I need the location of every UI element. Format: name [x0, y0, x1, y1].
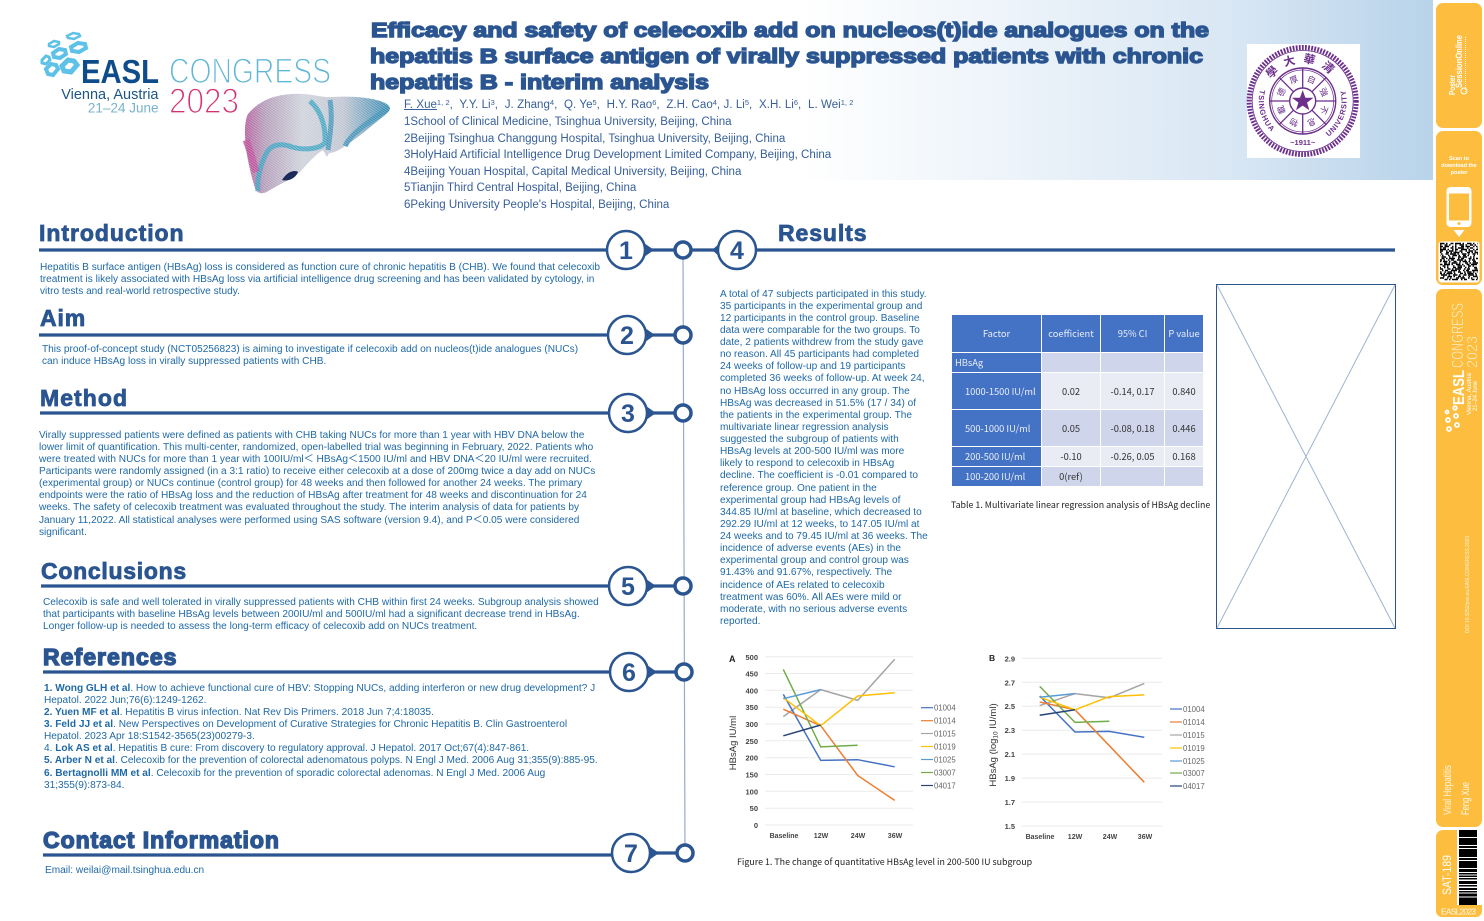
table: multivariate regression — [952, 315, 1203, 486]
panel: poster session online: SessionOnline — [1454, 35, 1464, 88]
y axis ticks: 450 — [745, 670, 758, 678]
panel: congress details — [1436, 289, 1482, 827]
table: multivariate regression: 0.168 — [1172, 449, 1196, 463]
text: introduction — [40, 262, 600, 297]
table: multivariate regression: -0.26, 0.05 — [1110, 449, 1155, 463]
text: method: weeks. The safety of celecoxib treatment was evaluated throughout the study. The interim analysis of data for patients by — [39, 502, 579, 513]
text: references: 3. Feld JJ et al. New Perspectives on Development of Curative Strategies for Chronic Hepatitis B. Clin Gastroenterol — [44, 719, 567, 730]
table: multivariate regression: -0.08, 0.18 — [1110, 420, 1155, 434]
text: method: Participants were randomly assigned (in a 3:1 ratio) to receive either celecoxib at a dose of 200mg twice a day add on NUCs — [39, 466, 595, 477]
table: multivariate regression: 95% CI — [1118, 326, 1147, 340]
y axis ticks: 100 — [745, 787, 758, 796]
seal inner characters: 不 — [1317, 104, 1331, 116]
legend: 01025 — [934, 756, 956, 764]
y axis ticks: 1.5 — [1005, 822, 1015, 831]
seal inner characters: 強 — [1317, 86, 1331, 99]
section marker 2: 2 — [620, 322, 634, 350]
section marker 3 — [40, 394, 691, 432]
title: hepatitis B surface antigen of virally suppressed patients with chronic — [370, 45, 1203, 68]
text: introduction: vitro tests and real-world retrospective study. — [40, 286, 240, 297]
figure caption: Figure 1. The change of quantitative HBsAg level in 200-500 IU subgroup — [737, 855, 1032, 868]
x axis labels: 24W — [851, 833, 866, 840]
logo year: 2023 — [169, 82, 239, 121]
seal inner characters: 息 — [1305, 115, 1318, 130]
affiliations — [404, 116, 832, 211]
section marker 3: 3 — [621, 400, 635, 428]
data lines — [1040, 683, 1144, 782]
text: results: A total of 47 subjects participated in this study. — [720, 288, 927, 300]
y axis ticks: 2.3 — [1005, 726, 1015, 735]
legend: 01019 — [1183, 744, 1205, 753]
heading: Method: Method — [40, 385, 128, 411]
text: references: 31;355(9):873-84. — [44, 780, 124, 791]
data lines — [783, 659, 895, 800]
text: results: 344.85 IU/ml at baseline, which decreased to — [720, 507, 922, 518]
y axis title: HBsAg IU/ml — [728, 716, 739, 770]
table: multivariate regression: 1000-1500 IU/ml — [965, 384, 1036, 398]
panel: scan to download — [1436, 131, 1482, 285]
affiliations: 1School of Clinical Medicine, Tsinghua University, Beijing, China — [404, 116, 732, 128]
panel: congress details: CONGRESS — [1448, 303, 1467, 368]
affiliations: 6Peking University People's Hospital, Beijing, China — [404, 199, 669, 211]
text: results: 24 weeks of follow-up and 19 participants — [720, 361, 905, 372]
affiliations: 3HolyHaid Artificial Intelligence Drug Development Limited Company, Beijing, China — [404, 149, 831, 161]
text: references: 6. Bertagnolli MM et al. Celecoxib for the prevention of sporadic colorectal adenomas. N Engl J Med. 2006 Aug — [44, 768, 545, 779]
table: multivariate regression: 0(ref) — [1059, 469, 1083, 483]
section marker 1 — [39, 231, 691, 269]
text: method: significant. — [39, 527, 87, 538]
x axis labels: 24W — [1103, 834, 1118, 841]
text: results: incidence of adverse events (AEs) in the — [720, 543, 901, 554]
text: references: Hepatol. 2022 Jun;76(6):1249-1262. — [44, 695, 206, 706]
panel: scan to download: download the — [1441, 163, 1477, 169]
panel: poster session online: Poster — [1447, 74, 1457, 95]
y axis ticks: 0 — [754, 821, 758, 830]
text: results: likely to respond to celecoxib in HBsAg — [720, 458, 894, 469]
panel: poster number and barcode — [1436, 830, 1482, 917]
affiliations: 2Beijing Tsinghua Changgung Hospital, Tsinghua University, Beijing, China — [404, 133, 785, 145]
text: results: data were comparable for the two groups. To — [720, 325, 920, 336]
legend: 03007 — [1183, 769, 1205, 778]
logo location: Vienna, Austria — [61, 87, 159, 103]
text: results: multivariate linear regression analysis — [720, 422, 889, 433]
y axis ticks: 1.9 — [1005, 774, 1015, 783]
x axis labels: 36W — [1138, 834, 1153, 841]
text: references: 1. Wong GLH et al. How to achieve functional cure of HBV: Stopping NUCs, adding interferon or new drug development? J — [44, 682, 595, 694]
y axis ticks: 350 — [745, 703, 758, 712]
text: conclusions: that participants with baseline HBsAg levels between 200IU/ml and 500IU/ml had a significant decrease trend in HBsAg. — [43, 609, 580, 620]
panel: congress details: Viral Hepatitis — [1442, 765, 1454, 815]
panel: congress details: 2023 — [1464, 336, 1481, 368]
table: multivariate regression: 0.05 — [1062, 420, 1080, 434]
panel: poster session online — [1436, 3, 1482, 128]
text: results: decline. The coefficient is -0.01 compared to — [720, 470, 918, 481]
heading: Contact Information: Contact Information — [43, 827, 280, 853]
text: results: HBsAg levels at 200-500 IU/ml was more — [720, 446, 904, 457]
legend: 03007 — [934, 768, 956, 778]
image placeholder — [1216, 284, 1396, 629]
text: aim: can induce HBsAg loss in virally suppressed patients with CHB. — [42, 356, 326, 367]
seal star — [1292, 90, 1314, 110]
seal top characters: 學大華清 — [1265, 53, 1336, 78]
heading: Conclusions: Conclusions — [41, 558, 187, 584]
authors and affiliations — [404, 98, 854, 211]
text: references — [44, 682, 598, 791]
text: results: suggested the subgroup of patients with — [720, 434, 899, 445]
text: results — [720, 288, 928, 627]
seal inner characters: 自 — [1305, 73, 1318, 87]
header gradient band — [0, 0, 1433, 180]
legend: 01004 — [934, 704, 956, 712]
x axis labels — [1026, 834, 1153, 841]
text: results: the patients in the experimental group. The — [720, 410, 912, 421]
EASL congress logo — [40, 32, 331, 121]
legend: 01015 — [934, 730, 956, 738]
text: results: experimental group and control group was — [720, 555, 909, 566]
text: results: 91.43% and 91.67%, respectively. The — [720, 567, 892, 578]
text: results: no HBsAg loss occurred in any group. The — [720, 386, 910, 396]
panel: congress details: DOI 10.3252/pso.eu.EASLCONGRESS.2023 — [1465, 536, 1471, 633]
heading: Results: Results — [778, 220, 867, 246]
table: multivariate regression: Factor — [983, 326, 1010, 340]
y axis title: IU/ml) — [988, 703, 999, 731]
seal inner characters: 厚 — [1288, 72, 1301, 87]
text: aim: This proof-of-concept study (NCT05256823) is aiming to investigate if celecoxib add on nucleos(t)ide analogues (NUCs) — [42, 344, 578, 354]
connector spine — [683, 250, 685, 853]
panel: congress details: 21–24 June — [1473, 380, 1479, 411]
text: method: January 11,2022. All statistical analyses were performed using SAS software (version 9.4), and P＜0.05 were considered — [39, 515, 579, 526]
seal inner characters: 載 — [1274, 103, 1289, 116]
y axis ticks: 150 — [745, 770, 758, 780]
panel: poster number and barcode: SAT-189 — [1440, 855, 1454, 895]
text: method: Virally suppressed patients were defined as patients with CHB taking NUCs for more than 1 year with HBV DNA below the — [39, 430, 584, 440]
text: references: 4. Lok AS et al. Hepatitis B cure: From discovery to regulatory approval. J Hepatol. 2017 Oct;67(4):847-861. — [44, 743, 529, 754]
panel: congress details: Vienna, Austria — [1466, 373, 1473, 415]
text: references: 5. Arber N et al. Celecoxib for the prevention of colorectal adenomatous polyps. N Engl J Med. 2006 Aug 31;355(9):885-95. — [44, 755, 598, 766]
x axis labels: Baseline — [770, 833, 799, 840]
text: results: incidence of AEs related to celecoxib — [720, 580, 885, 590]
text: contact email: Email: weilai@mail.tsinghua.edu.cn — [45, 864, 204, 876]
x axis labels — [770, 833, 903, 840]
panel: congress details: Feng Xue — [1460, 782, 1472, 815]
heading: Introduction: Introduction — [39, 220, 185, 246]
legend — [1170, 705, 1205, 791]
text: method: lower limit of quantification. This multi-center, randomized, open-labelled trial was beginning in February, 2022. Patients who — [39, 442, 593, 453]
heading: Aim: Aim — [40, 305, 86, 331]
panel letter: A — [729, 654, 736, 664]
y axis ticks: 250 — [745, 737, 758, 746]
heading: References: References — [43, 644, 178, 670]
y axis title: HBsAg (log — [988, 739, 999, 787]
section marker 5 — [41, 567, 691, 605]
legend: 01014 — [1183, 718, 1205, 727]
text: results: completed 36 weeks of follow-up. At week 24, — [720, 373, 925, 384]
text: results: 24 weeks and to 79.45 IU/ml at 36 weeks. The — [720, 531, 928, 542]
text: conclusions — [43, 596, 599, 632]
legend: 04017 — [1183, 782, 1205, 791]
table: multivariate regression: 0.840 — [1172, 384, 1196, 398]
table: multivariate regression: P value — [1168, 326, 1200, 340]
text: results: moderate, with no serious adverse events — [720, 604, 907, 615]
table: multivariate regression: 200-500 IU/ml — [965, 449, 1025, 463]
legend: 01004 — [1183, 705, 1205, 714]
table: multivariate regression: 100-200 IU/ml — [965, 469, 1025, 483]
seal ring text left: TSINGHUA — [1258, 90, 1274, 132]
section marker 4: 4 — [730, 237, 744, 265]
icon: hexagons — [1446, 406, 1459, 431]
title: Efficacy and safety of celecoxib add on nucleos(t)ide analogues on the — [371, 19, 1209, 42]
seal inner characters — [1274, 72, 1331, 130]
section marker 4 — [691, 231, 1395, 269]
y axis ticks: 2.5 — [1005, 702, 1015, 711]
panel: poster number and barcode: EASL2023 — [1441, 906, 1476, 916]
authors: F. Xue1, 2, Y.Y. Li3, J. Zhang4, Q. Ye5, H.Y. Rao6, Z.H. Cao4, J. Li5, X.H. Li6, L. Wei1, 2 — [404, 98, 853, 110]
table: multivariate regression: -0.14, 0.17 — [1110, 384, 1155, 398]
text: results: 292.29 IU/ml at 12 weeks, to 147.05 IU/ml at — [720, 519, 919, 530]
y axis ticks: 1.7 — [1005, 798, 1015, 807]
y axis ticks: 50 — [750, 804, 758, 813]
title — [370, 19, 1210, 94]
text: references: 2. Yuen MF et al. Hepatitis B virus infection. Nat Rev Dis Primers. 2018 Jun 7;4:18035. — [44, 707, 434, 718]
logo dates: 21–24 June — [88, 100, 158, 116]
x axis labels: Baseline — [1026, 834, 1055, 841]
text: results: 35 participants in the experimental group and — [720, 301, 922, 312]
seal ring text right: UNIVERSITY — [1326, 92, 1347, 136]
y axis ticks: 500 — [745, 653, 758, 662]
section marker 2 — [39, 316, 691, 354]
text: method: endpoints were the ratio of HBsAg loss and the reduction of HBsAg after treatment for 48 weeks and discontinuation for 24 — [39, 490, 587, 501]
table caption: Table 1. Multivariate linear regression analysis of HBsAg decline — [951, 498, 1210, 511]
section marker 5: 5 — [621, 573, 635, 601]
section marker 6 — [43, 653, 692, 691]
icon: arrow down — [1454, 230, 1464, 237]
text: aim — [42, 344, 578, 367]
panel: scan to download: poster — [1451, 170, 1468, 176]
text: introduction: Hepatitis B surface antigen (HBsAg) loss is considered as function cure of chronic hepatitis B (CHB). We found that celecoxib — [40, 262, 600, 272]
y axis ticks: 2.1 — [1005, 750, 1015, 759]
table: multivariate regression: 500-1000 IU/ml — [965, 420, 1030, 434]
text: conclusions: Longer follow-up is needed to assess the long-term efficacy of celecoxib add on NUCs treatment. — [43, 621, 477, 632]
x axis labels: 12W — [814, 833, 829, 840]
seal inner characters: 德 — [1274, 86, 1289, 98]
section marker 7: 7 — [624, 840, 638, 868]
section marker 7 — [43, 834, 693, 872]
text: method: were treated with NUCs for more than 1 year with 100IU/ml＜ HBsAg＜1500 IU/ml and HBV DNA＜20 IU/ml were recruited. — [39, 454, 592, 465]
text: results: treatment was 60%. All AEs were mild or — [720, 592, 901, 603]
y axis ticks: 200 — [745, 754, 758, 763]
panel letter: B — [989, 653, 995, 663]
y axis ticks: 2.9 — [1005, 654, 1015, 663]
text: method: (experimental group) or NUCs continue (control group) for 48 weeks and then followed for another 24 weeks. The primary — [39, 478, 582, 489]
text: results: HBsAg was decreased in 51.5% (17 / 34) of — [720, 398, 916, 409]
y axis ticks: 400 — [745, 686, 758, 695]
legend — [921, 704, 956, 790]
x axis labels: 12W — [1068, 834, 1083, 841]
section marker 1: 1 — [619, 237, 633, 265]
text: results: reference group. One patient in the — [720, 482, 877, 494]
legend: 01015 — [1183, 731, 1205, 740]
panel: scan to download: Scan to — [1449, 156, 1470, 162]
y axis ticks — [1005, 654, 1015, 831]
icon: hexagon cluster — [42, 33, 86, 75]
legend: 01025 — [1183, 757, 1205, 766]
text: results: experimental group had HBsAg levels of — [720, 495, 900, 506]
text: conclusions: Celecoxib is safe and well tolerated in virally suppressed patients with CHB within first 24 weeks. Subgroup analysis showed — [43, 596, 599, 608]
text: results: date, 2 patients withdrew from the study gave — [720, 337, 923, 348]
x axis labels: 36W — [888, 833, 903, 840]
legend: 04017 — [934, 782, 956, 790]
y axis ticks — [745, 653, 758, 830]
logo wordmark EASL: EASL — [81, 53, 159, 90]
y axis ticks: 2.7 — [1005, 678, 1015, 687]
barcode — [1459, 830, 1477, 905]
affiliations: 5Tianjin Third Central Hospital, Beijing, China — [404, 182, 636, 194]
section marker 6: 6 — [622, 659, 636, 687]
icon: phone — [1446, 187, 1472, 227]
text: references: Hepatol. 2023 Apr 18:S1542-3565(23)00279-3. — [44, 731, 255, 742]
text: results: 12 participants in the control group. Baseline — [720, 313, 920, 324]
text: introduction: treatment is likely associated with HBsAg loss via artificial intelligence drug screening and has been validated by cytology, in — [40, 274, 594, 285]
table: multivariate regression: 0.02 — [1062, 384, 1080, 398]
table: multivariate regression: 0.446 — [1172, 420, 1196, 434]
illustration: liver — [242, 94, 390, 194]
legend: 01014 — [934, 716, 956, 726]
table: multivariate regression: -0.10 — [1060, 449, 1082, 463]
text: results: no reason. All 45 participants had completed — [720, 349, 919, 360]
text: method — [39, 430, 595, 538]
table: multivariate regression: HBsAg — [955, 355, 983, 369]
seal inner characters: 物 — [1287, 115, 1300, 129]
y axis ticks: 300 — [745, 720, 758, 729]
logo: Tsinghua University seal — [1246, 44, 1360, 158]
y axis title: 10 — [992, 731, 1000, 739]
QR code — [1438, 242, 1480, 282]
logo wordmark CONGRESS: CONGRESS — [169, 52, 331, 91]
title: hepatitis B - interim analysis — [370, 71, 709, 94]
seal year: ~1911~ — [1290, 138, 1316, 147]
affiliations: 4Beijing Youan Hospital, Capital Medical University, Beijing, China — [404, 166, 741, 178]
text: results: reported. — [720, 616, 760, 627]
panel: congress details: EASL — [1451, 370, 1468, 405]
table: multivariate regression: coefficient — [1048, 326, 1094, 340]
legend: 01019 — [934, 742, 956, 752]
